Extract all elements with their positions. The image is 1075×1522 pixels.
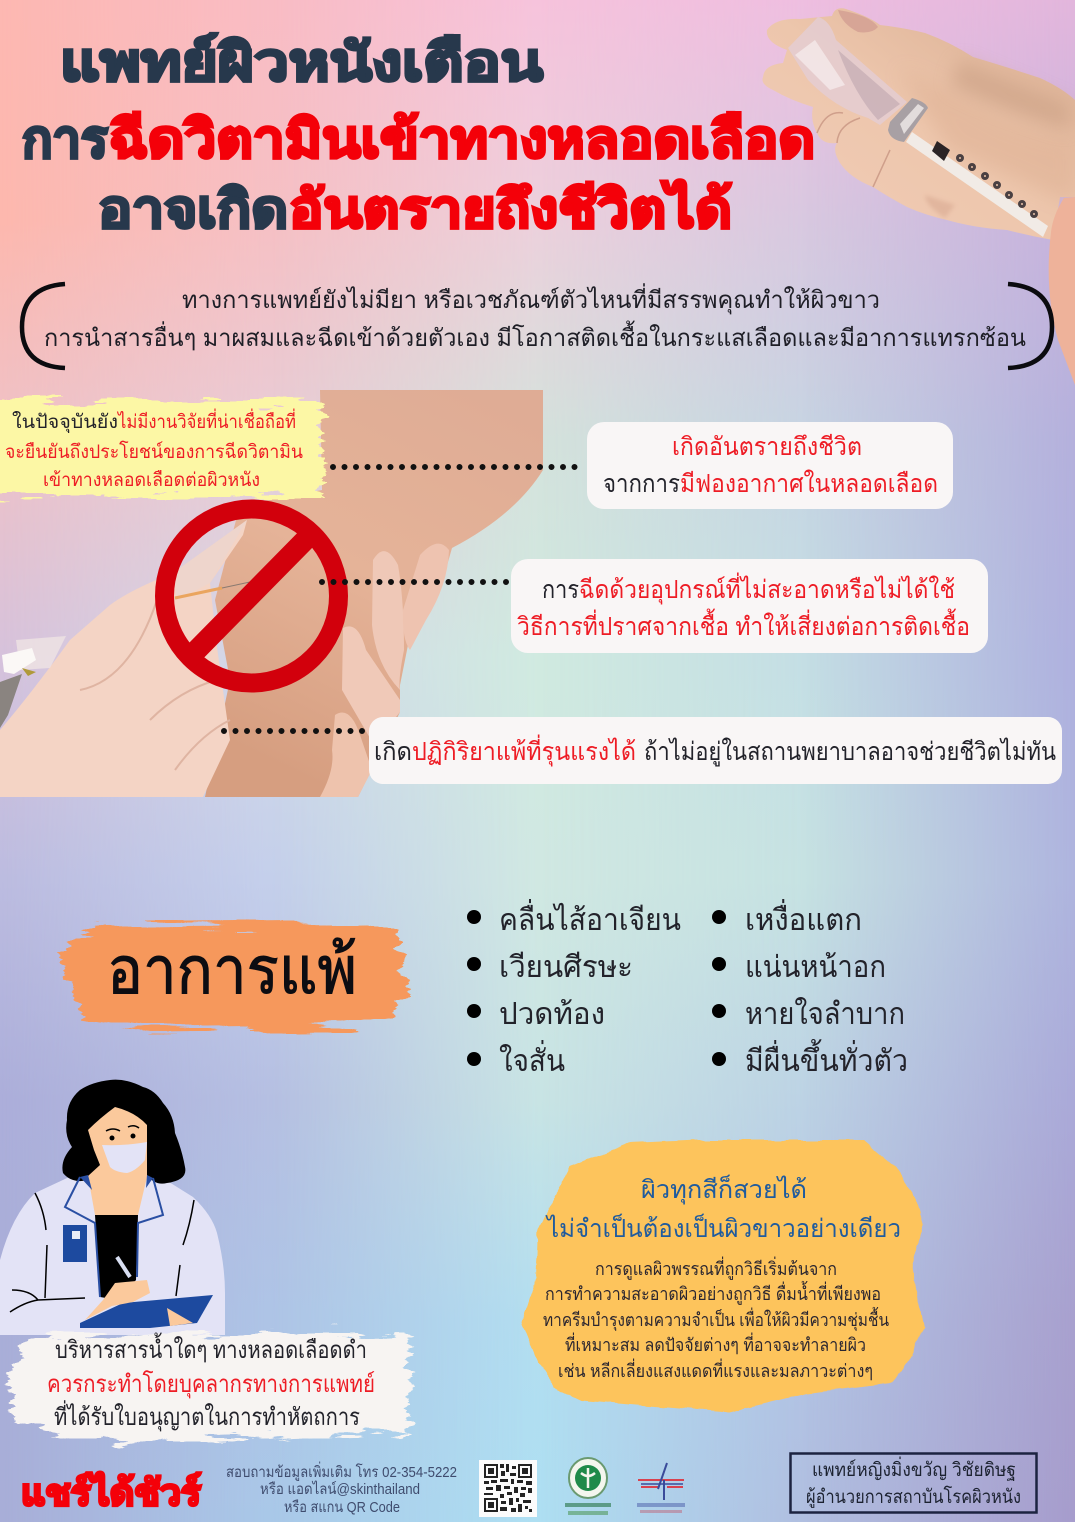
badge (63, 1225, 87, 1262)
callout: life-threatening air bubble: จากการ (603, 470, 680, 498)
title (22, 33, 815, 239)
note: white brush licensed personnel: ควรกระทำโดยบุคลากรทางการแพทย์ (47, 1370, 375, 1399)
intro paragraph with brackets: ทางการแพทย์ยังไม่มียา หรือเวชภัณฑ์ตัวไหนที่มีสรรพคุณทำให้ผิวขาว (182, 283, 880, 315)
illustration: doctor wearing mask (0, 1080, 225, 1335)
list: allergy symptoms right column: เหงื่อแตก (745, 899, 862, 937)
intro paragraph with brackets: การนำสารอื่นๆ มาผสมและฉีดเข้าด้วยตัวเอง มีโอกาสติดเชื้อในกระแสเลือดและมีอาการแทรกซ้อน (44, 320, 1026, 352)
title: แพทย์ผิวหนังเตือน (60, 33, 544, 92)
syringe part (16, 636, 66, 670)
signature box: director: ผู้อำนวยการสถาบันโรคผิวหนัง (806, 1485, 1021, 1508)
panel body text: การทำความสะอาดผิวอย่างถูกวิธี ดื่มน้ำที่เพียงพอ (545, 1281, 881, 1305)
contact information (226, 1461, 457, 1516)
panel body text: ทาครีมบำรุงตามความจำเป็น เพื่อให้ผิวมีความชุ่มชื้น (543, 1307, 889, 1331)
list: allergy symptoms right column: มีผื่นขึ้นทั่วตัว (745, 1039, 908, 1078)
title: อาจเกิด (98, 181, 288, 239)
contact information: สอบถามข้อมูลเพิ่มเติม โทร 02-354-5222 (226, 1461, 457, 1481)
neck and face (88, 1107, 147, 1215)
contact information: หรือ แอดไลน์@skinthailand (260, 1480, 420, 1498)
list: allergy symptoms left column: คลื่นไส้อาเจียน (499, 899, 681, 937)
heading: allergy banner: อาการแพ้ (107, 933, 357, 1007)
contact information: หรือ สแกน QR Code (284, 1499, 400, 1516)
signature box: director (790, 1454, 1036, 1512)
callout: life-threatening air bubble: เกิดอันตรายถึงชีวิต (672, 433, 862, 461)
list: allergy symptoms left column: เวียนศีรษะ (499, 951, 633, 984)
callout: life-threatening air bubble: มีฟองอากาศในหลอดเลือด (680, 469, 938, 498)
title: ฉีดวิตามินเข้าทางหลอดเลือด (109, 111, 815, 169)
dotted leader lines (224, 467, 579, 731)
note: yellow research callout: ในปัจจุบันยัง (12, 411, 118, 434)
note: yellow research callout: จะยืนยันถึงประโยชน์ของการฉีดวิตามิน (5, 440, 303, 463)
lapels (65, 1177, 163, 1297)
logo: department of medical services (565, 1458, 611, 1515)
black shirt (95, 1215, 138, 1300)
icon: prohibition sign (164, 509, 338, 683)
list: allergy symptoms left column: ใจสั่น (499, 1040, 565, 1078)
note: white brush licensed personnel: บริหารสารน้ำใดๆ ทางหลอดเลือดดำ (55, 1332, 367, 1364)
callout: severe allergic reaction: ปฏิกิริยาแพ้ที่รุนแรงได้ (412, 734, 636, 767)
callout: life-threatening air bubble (587, 422, 953, 509)
icon: glass vial (788, 17, 928, 142)
panel body text: การดูแลผิวพรรณที่ถูกวิธีเริ่มต้นจาก (595, 1256, 837, 1280)
callout: severe allergic reaction (369, 717, 1062, 784)
fingers on the arm (372, 551, 404, 690)
heading: allergy banner (62, 923, 408, 1028)
note: yellow research callout (0, 400, 322, 496)
title: อันตรายถึงชีวิตได้ (289, 179, 732, 239)
logo: institute of dermatology (637, 1463, 685, 1513)
callout: unclean equipment infection: วิธีการที่ปราศจากเชื้อ ทำให้เสี่ยงต่อการติดเชื้อ (517, 608, 970, 641)
title: การ (22, 111, 108, 169)
panel heading: ผิวทุกสีก็สวยได้ (641, 1174, 807, 1205)
icon: syringe (906, 132, 1048, 237)
list: allergy symptoms left column: ปวดท้อง (499, 998, 605, 1031)
list: allergy symptoms left column (467, 899, 681, 1078)
note: yellow research callout: ไม่มีงานวิจัยที่น่าเชื่อถือที่ (116, 408, 296, 433)
photo: hand holding vial and syringe (762, 8, 1075, 385)
coat lines (10, 1193, 194, 1312)
note: white brush licensed personnel: ที่ได้รับใบอนุญาตในการทำหัตถการ (54, 1400, 360, 1432)
mask (102, 1142, 147, 1173)
intro paragraph with brackets (22, 283, 1052, 368)
clipboard and hands (80, 1295, 213, 1328)
signature box: director: แพทย์หญิงมิ่งขวัญ วิชัยดิษฐ (812, 1456, 1016, 1481)
callout: unclean equipment infection (511, 559, 988, 653)
list: allergy symptoms right column (712, 899, 908, 1078)
list: allergy symptoms right column: แน่นหน้าอก (745, 951, 886, 984)
panel body text: ที่เหมาะสม ลดปัจจัยต่างๆ ที่อาจจะทำลายผิว (565, 1332, 866, 1355)
QR code (479, 1460, 537, 1517)
callout: unclean equipment infection: การ (542, 576, 579, 604)
share slogan: แชร์ได้ชัวร์ (21, 1471, 202, 1513)
panel body text: เช่น หลีกเลี่ยงแสงแดดที่แรงและมลภาวะต่างๆ (558, 1358, 873, 1381)
coat (0, 1172, 225, 1335)
panel heading: ไม่จำเป็นต้องเป็นผิวขาวอย่างเดียว (545, 1213, 901, 1243)
photo: injection into arm (0, 390, 543, 797)
note: yellow research callout: เข้าทางหลอดเลือดต่อผิวหนัง (43, 470, 260, 491)
panel heading (545, 1174, 901, 1243)
hair (62, 1080, 185, 1184)
panel body text (543, 1256, 889, 1381)
panel: skin colour advice (522, 1140, 924, 1412)
callout: severe allergic reaction: เกิด (374, 738, 412, 766)
left hand (0, 520, 247, 797)
callout: unclean equipment infection: ฉีดด้วยอุปกรณ์ที่ไม่สะอาดหรือไม่ได้ใช้ (579, 572, 955, 605)
list: allergy symptoms right column: หายใจลำบาก (745, 997, 905, 1031)
note: white brush licensed personnel (8, 1332, 412, 1442)
